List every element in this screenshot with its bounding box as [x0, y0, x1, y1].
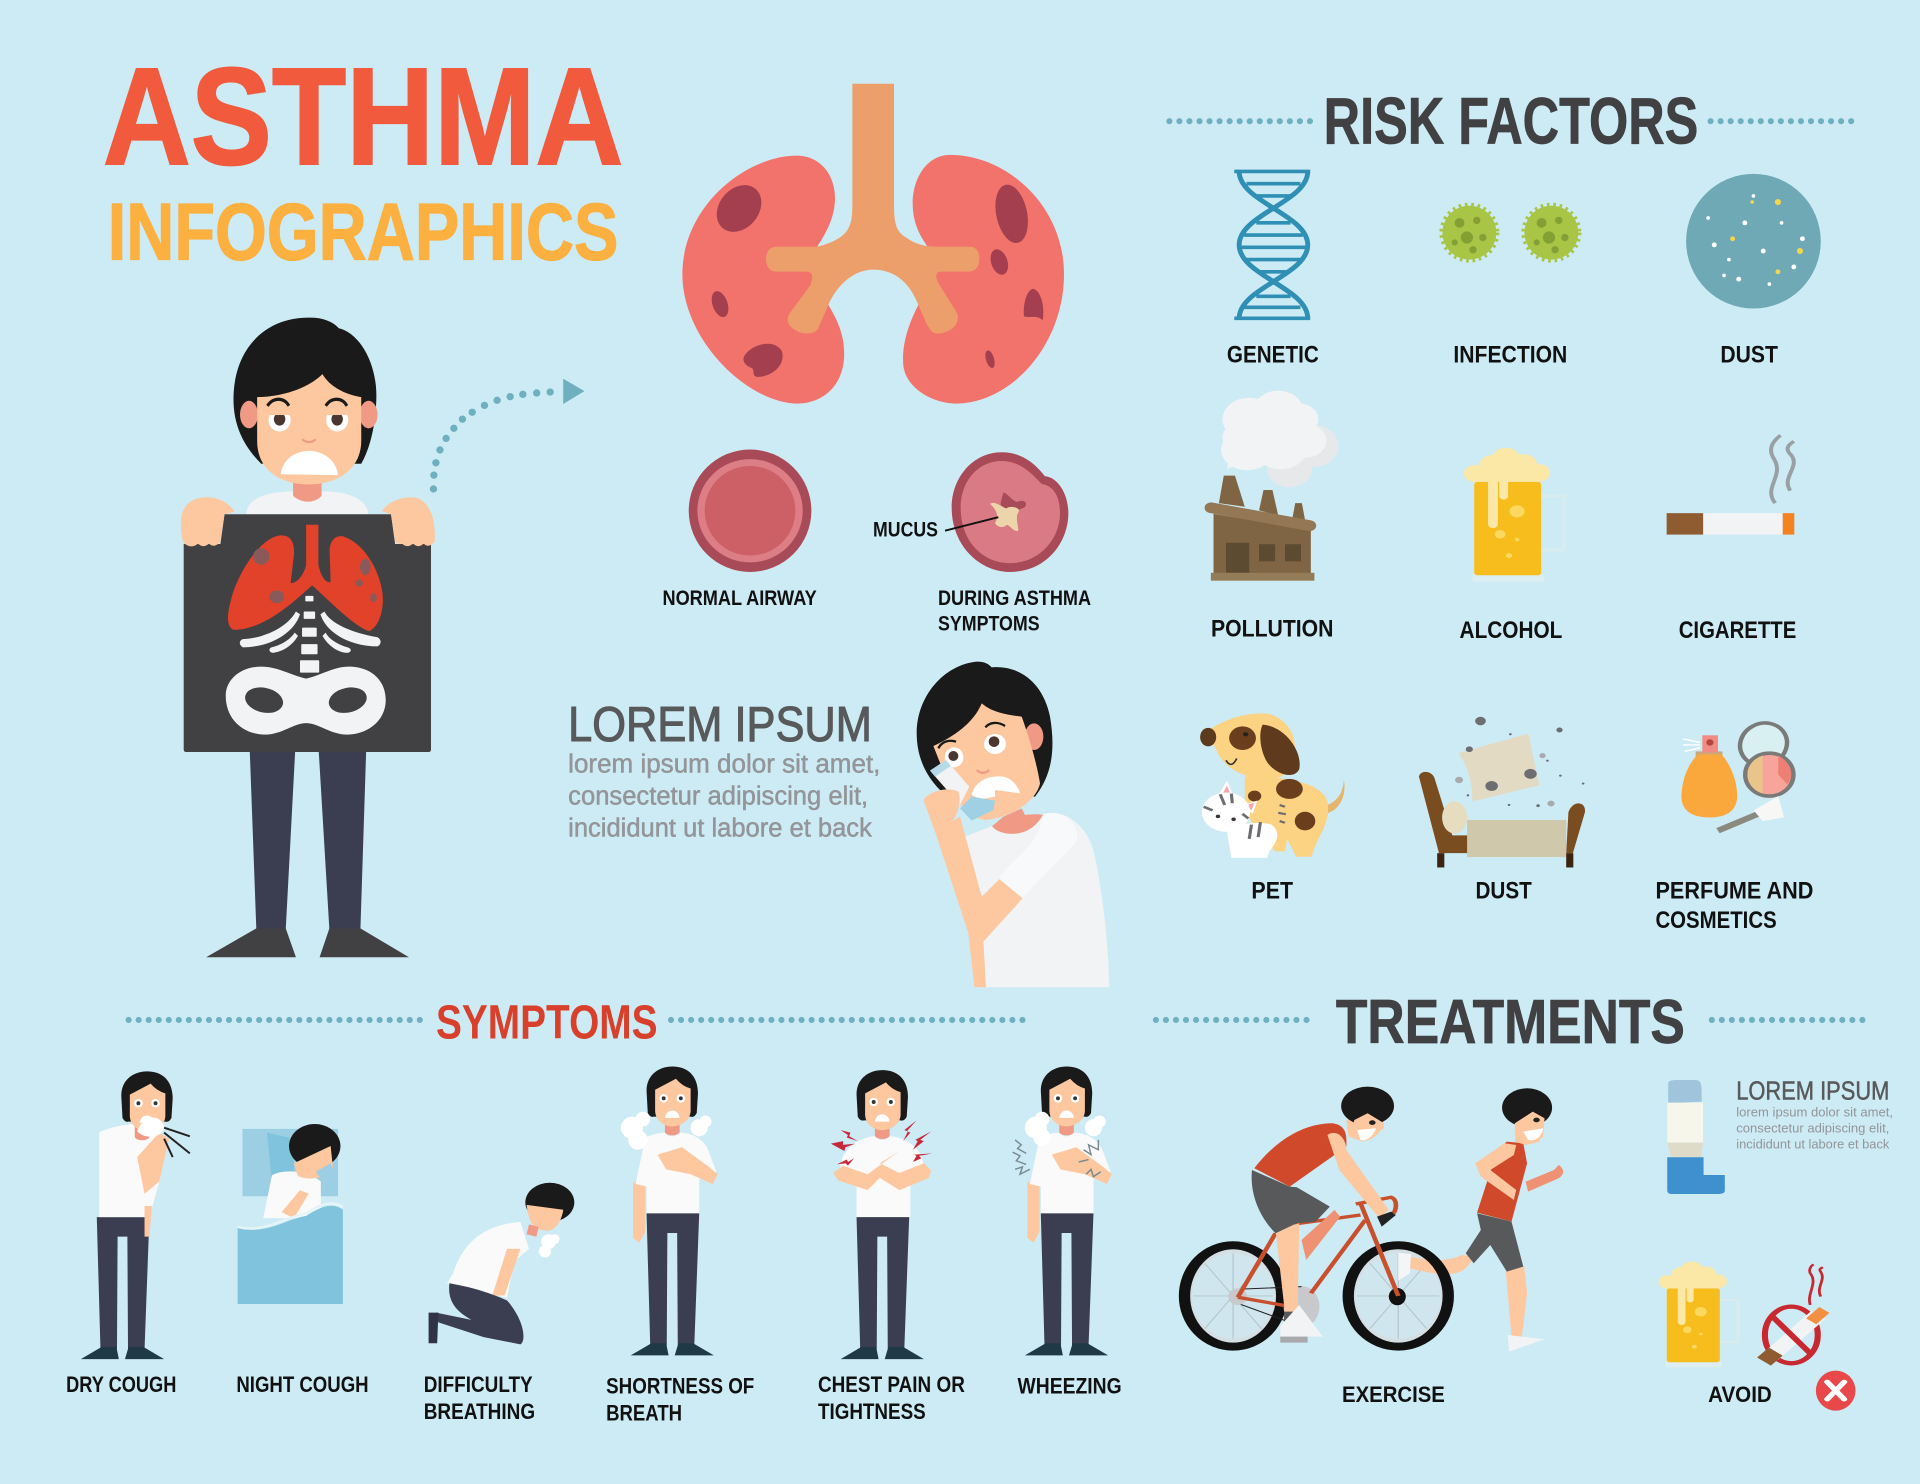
normal airway [689, 450, 811, 572]
face [257, 374, 361, 484]
label: cigarette: CIGARETTE [1679, 617, 1796, 644]
figure: shortness of breath [621, 1066, 718, 1355]
label: dust bed: DUST [1475, 878, 1532, 905]
right lung [903, 155, 1064, 404]
label: genetic: GENETIC [1227, 341, 1319, 368]
illustration: bicycle [1184, 1197, 1448, 1347]
label: pet: PET [1251, 878, 1293, 905]
asthma airway with mucus [945, 452, 1068, 572]
label: alcohol: ALCOHOL [1460, 617, 1562, 644]
neck [293, 477, 322, 502]
icon: beer to avoid [1659, 1262, 1738, 1367]
shoes [206, 928, 409, 957]
risk factor icons [1200, 391, 1794, 867]
illustration: cyclist [1252, 1087, 1396, 1343]
label: chest pain or tightness: TIGHTNESS [818, 1399, 926, 1424]
label: night cough: NIGHT COUGH [236, 1372, 369, 1397]
text block: inhaler lorem ipsum: incididunt ut labore et back [1736, 1137, 1890, 1152]
label: exercise: EXERCISE [1342, 1382, 1445, 1407]
label: chest pain or tightness: CHEST PAIN OR [818, 1372, 965, 1397]
bicycle wheel backgrounds [1188, 1249, 1444, 1343]
icon: virus [1442, 206, 1578, 260]
label: shortness of breath [606, 1373, 754, 1425]
figure: difficulty breathing [429, 1183, 574, 1344]
figure: dry cough [81, 1071, 190, 1359]
x-ray film [184, 514, 431, 752]
label: during asthma symptoms: SYMPTOMS [938, 613, 1040, 636]
left lung [682, 156, 844, 404]
icon: DNA [1234, 171, 1310, 318]
icon: dust particles [1686, 174, 1821, 309]
section heading: symptoms: SYMPTOMS [436, 996, 658, 1049]
cat [1202, 781, 1286, 858]
label: pollution: POLLUTION [1211, 616, 1333, 643]
label: infection: INFECTION [1453, 341, 1567, 368]
icon: dog and cat [1200, 713, 1345, 858]
legs [250, 752, 366, 930]
label: difficulty breathing: DIFFICULTY [424, 1372, 533, 1397]
figure: wheezing [1013, 1066, 1112, 1355]
text block: lorem ipsum: LOREM IPSUM [568, 698, 872, 752]
character using inhaler [917, 662, 1109, 987]
icon: bed and dust [1419, 717, 1585, 867]
label: dust: DUST [1720, 341, 1778, 368]
section heading: risk factors: RISK FACTORS [1324, 84, 1698, 158]
treatments illustrations [1184, 1080, 1856, 1411]
label: shortness of breath: BREATH [606, 1400, 682, 1425]
label: chest pain or tightness [818, 1372, 965, 1424]
label: perfume and cosmetics: PERFUME AND [1655, 878, 1813, 905]
title: ASTHMA: ASTHMA [103, 40, 623, 194]
lungs illustration [682, 84, 1068, 572]
label: shortness of breath: SHORTNESS OF [606, 1373, 754, 1398]
illustration: runner [1398, 1088, 1563, 1352]
trachea and bronchi [766, 84, 979, 334]
arrow: dotted curve to lungs [430, 379, 584, 493]
label: during asthma symptoms [938, 587, 1091, 636]
label: normal airway: NORMAL AIRWAY [662, 587, 817, 610]
figure: night cough [238, 1124, 343, 1304]
inhaler [930, 760, 995, 821]
icon: cross badge [1816, 1371, 1856, 1411]
icon: inhaler [1667, 1080, 1725, 1194]
text block: inhaler lorem ipsum [1736, 1078, 1893, 1152]
x-ray lungs [228, 525, 383, 631]
label: perfume and cosmetics: COSMETICS [1655, 907, 1777, 934]
label: during asthma symptoms: DURING ASTHMA [938, 587, 1091, 610]
x-ray pelvis [226, 667, 386, 735]
label: dry cough: DRY COUGH [66, 1372, 176, 1397]
icon: factory [1211, 391, 1339, 581]
open mouth [281, 451, 338, 475]
hands [181, 497, 235, 546]
icon: no smoking [1764, 1264, 1824, 1363]
label: difficulty breathing: BREATHING [424, 1399, 535, 1424]
subtitle: INFOGRAPHICS: INFOGRAPHICS [108, 188, 618, 278]
figure: chest pain [831, 1070, 932, 1359]
lung spots [708, 175, 1043, 377]
icon: cigarette [1667, 435, 1794, 535]
text block: lorem ipsum: consectetur adipiscing elit, [568, 782, 868, 810]
icon: perfume and cosmetics [1681, 719, 1793, 831]
character holding x-ray [181, 318, 435, 957]
label: difficulty breathing [424, 1372, 535, 1424]
label: perfume and cosmetics [1655, 878, 1813, 934]
section heading: treatments: TREATMENTS [1336, 987, 1685, 1057]
label: avoid: AVOID [1708, 1382, 1772, 1407]
text block: inhaler lorem ipsum: LOREM IPSUM [1736, 1078, 1889, 1106]
text block: lorem ipsum [568, 698, 880, 842]
label: wheezing: WHEEZING [1018, 1373, 1122, 1398]
x-ray spine and ribs [240, 596, 381, 673]
label: mucus: MUCUS [873, 518, 938, 541]
text block: inhaler lorem ipsum: consectetur adipiscing elit, [1736, 1121, 1889, 1136]
hair [233, 318, 376, 464]
text block: lorem ipsum: lorem ipsum dolor sit amet, [568, 751, 880, 779]
text block: lorem ipsum: incididunt ut labore et back [568, 814, 872, 842]
text block: inhaler lorem ipsum: lorem ipsum dolor sit amet, [1736, 1105, 1893, 1120]
icon: beer [1464, 448, 1564, 582]
shirt [246, 491, 368, 514]
